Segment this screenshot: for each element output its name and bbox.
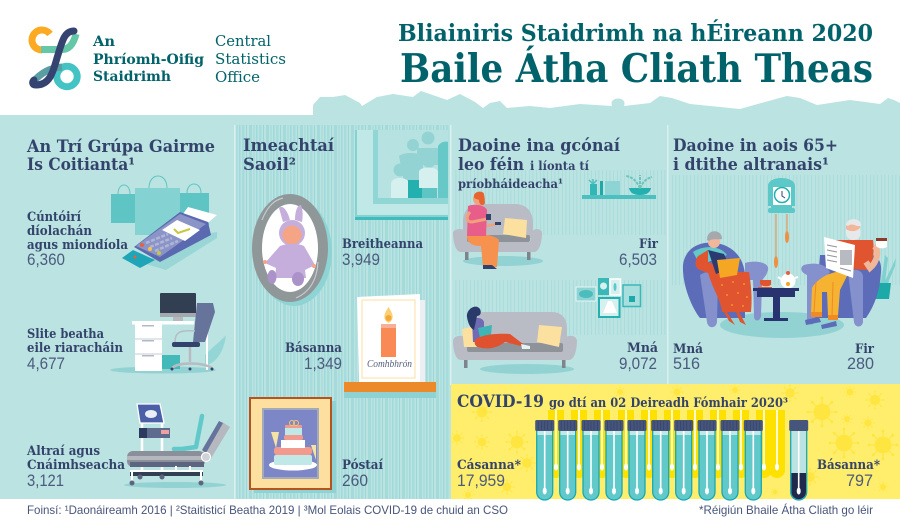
icon: wall picture frames bbox=[576, 278, 640, 317]
text: other administrative careers: eile riaracháin bbox=[27, 341, 123, 356]
heading: life events: Imeachtaí bbox=[243, 136, 335, 155]
icon: elderly man in armchair bbox=[801, 219, 887, 329]
text: COVID deaths bbox=[817, 458, 880, 490]
icon: wall shelf with plants and books bbox=[582, 175, 656, 199]
text: marriages: Póstaí bbox=[342, 458, 383, 473]
icon: family photo frame bbox=[355, 130, 448, 220]
title: Bliainiris Staidrimh na hÉireann 2020 bbox=[398, 18, 873, 47]
heading: living alone: leo féin bbox=[458, 155, 524, 174]
logo text: Irish: Staidrimh bbox=[93, 69, 171, 85]
text: sales and retail: agus miondíola bbox=[27, 238, 129, 253]
icon: wedding cake in frame bbox=[250, 398, 336, 493]
heading: aged 65+: Daoine in aois 65+ bbox=[673, 136, 838, 155]
logo text: English bbox=[215, 32, 286, 86]
text: sales and retail: 6,360 bbox=[27, 251, 65, 269]
text: women living alone: Mná bbox=[627, 341, 659, 356]
text: women living alone: 9,072 bbox=[619, 355, 657, 373]
heading: COVID-19: go dtí an 02 Deireadh Fómhair 2020³ bbox=[549, 396, 788, 411]
logo mark bbox=[32, 30, 77, 87]
heading: living alone: i líonta tí bbox=[530, 158, 589, 173]
heading: aged 65+: i dtithe altranais¹ bbox=[673, 155, 829, 174]
text: women living alone bbox=[619, 341, 659, 373]
icon: sympathy card on shelf bbox=[344, 294, 436, 398]
logo text: English: Central bbox=[215, 32, 271, 50]
text: men 65+ bbox=[847, 342, 874, 373]
text: sales and retail: díolachán bbox=[27, 224, 92, 239]
text: other administrative careers bbox=[27, 327, 123, 373]
heading: life events: Saoil² bbox=[243, 155, 296, 174]
panel: living alone bbox=[453, 136, 659, 374]
virus pattern bbox=[450, 384, 898, 500]
text: COVID deaths: 797 bbox=[846, 472, 873, 490]
heading: occupations: Is Coitianta¹ bbox=[27, 155, 135, 174]
text: women 65+: Mná bbox=[673, 342, 704, 357]
heading: COVID-19 bbox=[457, 392, 788, 411]
panel: aged 65+ in nursing homes bbox=[673, 136, 896, 373]
text: births: Breitheanna bbox=[342, 237, 424, 252]
icon: elderly woman in armchair bbox=[683, 231, 768, 327]
icon: sympathy card on shelf: Comhbhrón bbox=[367, 359, 412, 370]
teal background bbox=[0, 115, 900, 499]
logo text: English: Statistics bbox=[215, 50, 286, 68]
text: cases: 17,959 bbox=[457, 472, 505, 490]
text: deaths bbox=[285, 341, 343, 373]
test tube: deaths bbox=[789, 420, 808, 500]
tube shadows bbox=[548, 410, 785, 478]
logo text: Irish: An bbox=[92, 34, 115, 50]
text: sales and retail: Cúntóirí bbox=[27, 210, 81, 225]
text: men living alone bbox=[619, 237, 658, 269]
title bbox=[398, 18, 873, 92]
logo text: English: Office bbox=[215, 68, 260, 86]
text: deaths: 1,349 bbox=[304, 355, 342, 373]
text: marriages: 260 bbox=[342, 472, 368, 490]
icon: floor rug bbox=[720, 312, 844, 338]
text: deaths: Básanna bbox=[285, 341, 343, 356]
text: women 65+ bbox=[673, 342, 704, 373]
text: nurses and midwives bbox=[26, 444, 126, 490]
heading: living alone: Daoine ina gcónaí bbox=[458, 136, 621, 155]
text: nurses and midwives: Altraí agus bbox=[26, 444, 100, 459]
text: sales and retail bbox=[27, 210, 129, 269]
footer: note: *Réigiún Bhaile Átha Cliath go léir bbox=[699, 502, 873, 517]
heading: living alone: príobháideacha¹ bbox=[458, 176, 563, 191]
text: marriages bbox=[342, 458, 383, 490]
icon: tea table bbox=[753, 271, 799, 321]
heading: occupations: An Trí Grúpa Gairme bbox=[26, 137, 215, 156]
icon: woman on sofa reading bbox=[453, 307, 577, 374]
text: other administrative careers: 4,677 bbox=[27, 355, 65, 373]
text: other administrative careers: Slite beatha bbox=[27, 327, 105, 342]
icon: cuckoo clock bbox=[768, 178, 795, 268]
logo text: Irish: Phríomh-Oifig bbox=[93, 52, 204, 68]
text: cases: Cásanna* bbox=[457, 458, 521, 473]
panel: COVID-19 bbox=[450, 384, 900, 500]
heading: aged 65+ bbox=[673, 136, 838, 174]
icon: baby in oval frame bbox=[252, 194, 332, 306]
panel: occupations bbox=[26, 137, 230, 490]
text: women 65+: 516 bbox=[673, 355, 700, 373]
icon: payment terminal bbox=[122, 207, 217, 270]
test tubes: cases bbox=[535, 420, 763, 500]
text: cases bbox=[457, 458, 521, 490]
text: men 65+: Fir bbox=[855, 342, 874, 357]
heading: life events bbox=[243, 136, 335, 174]
text: nurses and midwives: Cnáimhseacha bbox=[27, 458, 126, 473]
text: nurses and midwives: 3,121 bbox=[27, 472, 64, 490]
icon: shopping bags bbox=[111, 176, 209, 235]
text: men living alone: Fir bbox=[639, 237, 658, 252]
text: men 65+: 280 bbox=[847, 355, 874, 373]
icon: man on sofa with mug bbox=[453, 192, 543, 269]
text: COVID deaths: Básanna* bbox=[817, 458, 880, 473]
header logo bbox=[32, 30, 286, 87]
icon: hospital bed and monitor bbox=[124, 404, 230, 488]
skyline background bbox=[313, 91, 900, 116]
wall stripes bbox=[236, 125, 450, 499]
text: births: 3,949 bbox=[342, 251, 380, 269]
text: men living alone: 6,503 bbox=[619, 251, 657, 269]
logo text: Irish bbox=[92, 34, 204, 85]
text: births bbox=[342, 237, 424, 269]
heading: living alone bbox=[458, 136, 621, 191]
panel: life events bbox=[243, 130, 448, 493]
heading: occupations bbox=[26, 137, 215, 174]
icon: office desk and chair bbox=[110, 293, 226, 374]
icon: plant bbox=[872, 255, 896, 299]
heading: COVID-19: COVID-19 bbox=[457, 392, 544, 411]
footer: sources: Foinsí: ¹Daonáireamh 2016 | ²Staitisticí Beatha 2019 | ³Mol Eolais COVID-19 de chuid an CSO bbox=[27, 503, 508, 517]
